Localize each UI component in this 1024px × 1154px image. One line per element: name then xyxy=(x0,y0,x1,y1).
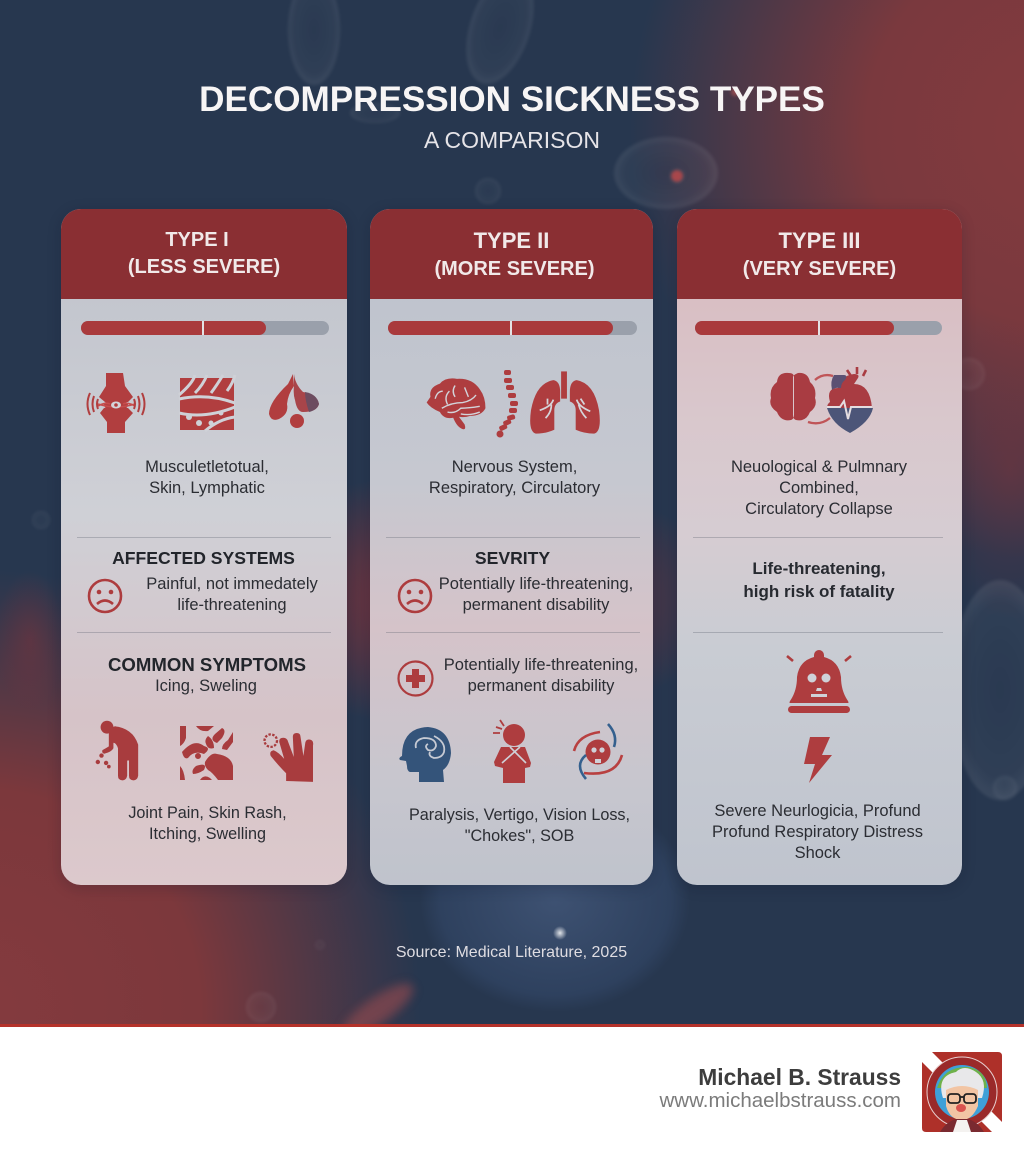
type III symptoms text: Severe Neurlogicia, Profund xyxy=(714,802,921,820)
type II icon: brain xyxy=(426,378,486,430)
type II systems text: Nervous System, xyxy=(452,458,577,476)
type III systems text: Neuological & Pulmnary xyxy=(731,458,907,476)
type I sad face icon xyxy=(88,578,122,614)
type III symptoms text: Shock xyxy=(795,844,840,862)
type III icon: skull alarm bell xyxy=(786,650,852,713)
type I common symptoms heading: COMMON SYMPTOMS xyxy=(108,654,306,675)
type I icon: lymph node xyxy=(269,374,319,428)
source note: Source: Medical Literature, 2025 xyxy=(396,944,627,961)
type I icon: joint xyxy=(86,373,146,433)
type III header xyxy=(677,209,962,299)
type II severity text: permanent disability xyxy=(463,596,609,614)
type II treatment text xyxy=(444,656,638,695)
type II treatment text: Potentially life-threatening, xyxy=(444,656,638,674)
type I icon: person in pain xyxy=(96,720,138,780)
type III systems text xyxy=(731,458,907,518)
type I systems text: Musculetletotual, xyxy=(145,458,269,476)
type II severity text xyxy=(439,575,633,614)
type III systems text: Combined, xyxy=(779,479,859,497)
type III severity text: high risk of fatality xyxy=(743,582,895,601)
type II icon: choking person xyxy=(493,720,531,783)
type I severity bar xyxy=(81,321,329,335)
type II header: TYPE II xyxy=(474,228,549,253)
type I severity text: Painful, not immedately xyxy=(146,575,318,593)
type I systems text: Skin, Lymphatic xyxy=(149,479,265,497)
type I symptoms text: Itching, Swelling xyxy=(149,825,266,843)
type II severity text: Potentially life-threatening, xyxy=(439,575,633,593)
type II treatment text: permanent disability xyxy=(468,677,614,695)
type III symptoms text xyxy=(712,802,923,862)
type III severity text: Life-threatening, xyxy=(752,559,886,578)
type II icon: spine xyxy=(496,370,518,438)
type II header: (MORE SEVERE) xyxy=(434,258,595,280)
type I icon: skin rash xyxy=(180,726,233,780)
title: DECOMPRESSION SICKNESS TYPES xyxy=(199,80,825,119)
panel: type II xyxy=(370,209,653,885)
type II systems text: Respiratory, Circulatory xyxy=(429,479,600,497)
type II systems text xyxy=(429,458,600,497)
type II severity bar xyxy=(388,321,637,335)
type III severity bar xyxy=(695,321,942,335)
type III icon: brain and heart xyxy=(770,367,873,433)
type I symptoms short text: Icing, Sweling xyxy=(155,677,257,695)
type II icon: swirling skull xyxy=(572,723,624,780)
type III header: TYPE III xyxy=(779,228,860,253)
type I header: (LESS SEVERE) xyxy=(128,256,280,278)
type II icon: lungs xyxy=(530,371,600,434)
author logo xyxy=(922,1052,1002,1132)
type I icon: skin xyxy=(180,378,234,430)
subtitle: A COMPARISON xyxy=(424,127,600,153)
type II icon: head with spiral xyxy=(399,727,451,782)
author website: www.michaelbstrauss.com xyxy=(659,1089,901,1112)
type II symptoms text xyxy=(409,806,630,845)
footer accent line xyxy=(0,1024,1024,1027)
type III header: (VERY SEVERE) xyxy=(743,258,896,280)
type II sad face icon xyxy=(398,578,432,614)
type II symptoms text: "Chokes", SOB xyxy=(465,827,574,845)
type III symptoms text: Profund Respiratory Distress xyxy=(712,823,923,841)
type III severity text xyxy=(743,559,895,601)
type I symptoms text: Joint Pain, Skin Rash, xyxy=(128,804,287,822)
type II medical cross icon xyxy=(397,660,434,697)
type III icon: lightning bolt xyxy=(804,737,832,783)
type I icon: itching hand xyxy=(263,733,314,782)
panel: type I xyxy=(61,209,347,885)
type I severity text xyxy=(146,575,318,614)
type I header xyxy=(61,209,347,299)
footer xyxy=(0,1024,1024,1154)
type I severity text: life-threatening xyxy=(177,596,287,614)
type I symptoms text xyxy=(128,804,287,843)
type III systems text: Circulatory Collapse xyxy=(745,500,893,518)
author name: Michael B. Strauss xyxy=(698,1064,901,1090)
type I header: TYPE I xyxy=(165,229,229,251)
type II severity heading: SEVRITY xyxy=(475,548,550,568)
type I affected systems heading: AFFECTED SYSTEMS xyxy=(112,548,295,568)
type I systems text xyxy=(145,458,269,497)
panel: type III xyxy=(677,209,962,885)
type II symptoms text: Paralysis, Vertigo, Vision Loss, xyxy=(409,806,630,824)
type II header xyxy=(370,209,653,299)
